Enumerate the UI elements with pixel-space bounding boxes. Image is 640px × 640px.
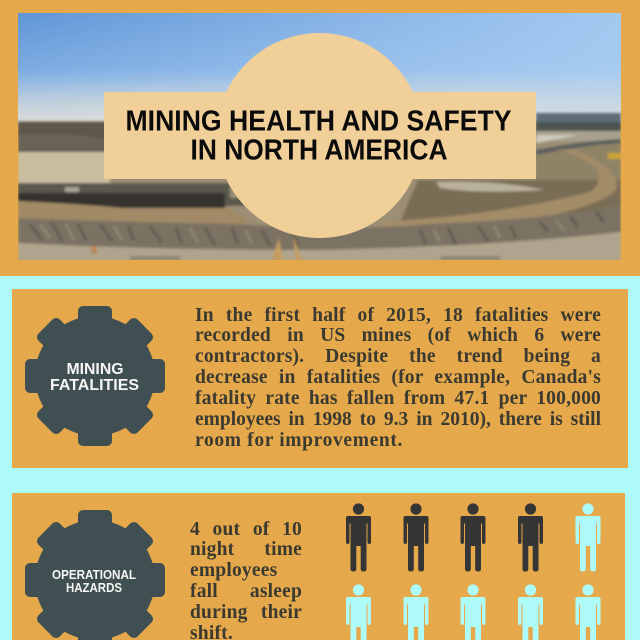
header photo: open-pit mine landscape [18,13,621,260]
icon: person empty 6 [346,584,371,640]
text: night time employees: 4 out of 10 [190,518,302,540]
title [126,106,512,166]
chart: 4 of 10 people pictogram [346,503,600,640]
icon: gear with label mining fatalities: MINING [66,361,124,378]
text: fatalities paragraph: recorded in US mines (of which 6 were [195,325,601,346]
icon: gear with label operational hazards: HAZARDS [66,580,122,595]
panel: mining fatalities [12,289,628,468]
text: fatalities paragraph: contractors). Despite the trend being a [195,346,601,367]
icon: person filled 3 [460,503,486,572]
text: fatalities paragraph [195,304,601,451]
text: fatalities paragraph: decrease in fatalities (for example, Canada's [195,367,601,388]
header band [0,0,640,276]
title: MINING HEALTH AND SAFETY [126,106,512,138]
text: fatalities paragraph: In the first half of 2015, 18 fatalities were [195,304,601,326]
icon: gear with label operational hazards: OPERATIONAL [52,567,136,582]
text: fatalities paragraph: employees in 1998 to 9.3 in 2010), there is still [195,409,601,430]
text: night time employees [190,518,302,640]
icon: person empty 5 [576,503,600,572]
icon: gear with label operational hazards [25,510,165,640]
icon: person empty 9 [518,584,543,640]
panel: operational hazards [12,493,625,640]
title backing: circle and banner [104,33,536,238]
icon: person empty 7 [404,584,428,640]
text: fatalities paragraph: room for improvement. [195,430,403,451]
text: night time employees: fall asleep [190,581,302,602]
icon: gear with label mining fatalities [25,306,165,446]
text: fatalities paragraph: fatality rate has fallen from 47.1 per 100,000 [195,388,601,409]
icon: person empty 10 [576,584,600,640]
icon: person filled 4 [518,503,543,572]
icon: person empty 8 [460,584,486,640]
icon: person filled 2 [404,503,428,572]
text: night time employees: night time [190,539,302,560]
text: night time employees: during their [190,602,302,623]
text: night time employees: employees [190,560,277,581]
icon: person filled 1 [346,503,371,572]
icon: gear with label mining fatalities: FATALITIES [50,377,139,394]
title: IN NORTH AMERICA [190,134,448,166]
